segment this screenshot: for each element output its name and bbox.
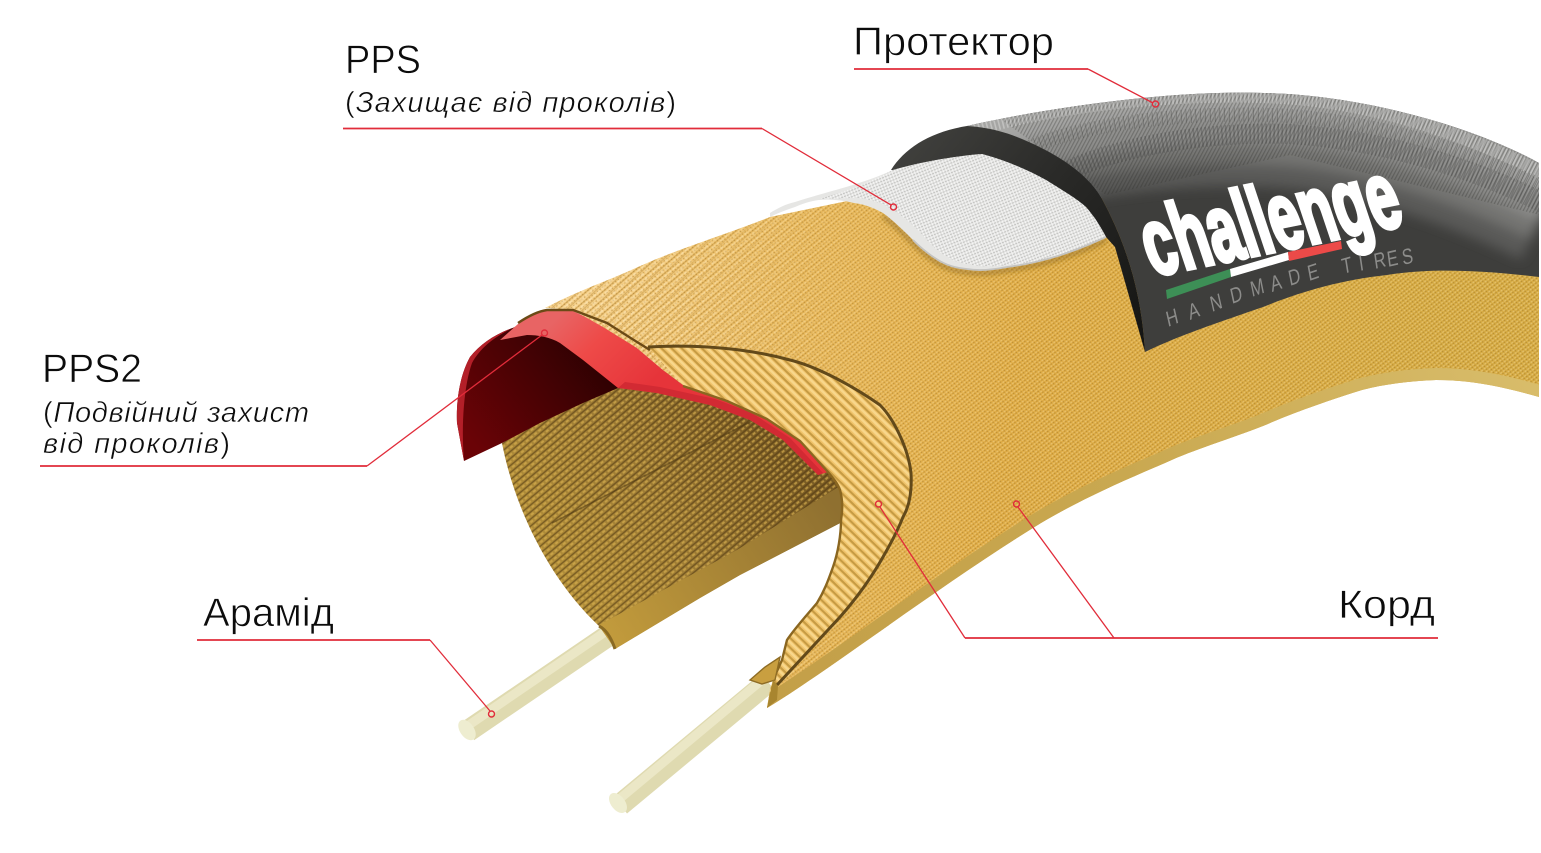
label: protector [853,20,1158,107]
label: protector: Протектор [853,20,1054,64]
label: PPS2 [40,330,548,466]
label: PPS2: від проколів) [43,428,230,460]
cord casing [517,198,1539,708]
challenge logo: challenge [1125,141,1413,296]
label: PPS2: PPS2 [42,347,142,391]
tread shading along arc [960,90,1541,215]
sidewall lower band [767,380,1539,708]
label: cord: Корд [1338,583,1435,627]
italian tricolor stripe [1166,241,1342,299]
bead rod: front aramid [605,680,768,816]
handmade tires caption: HANDMADE TIRES [1164,244,1415,332]
tread and black casing [891,90,1541,352]
inner casing weave [502,370,850,649]
label: PPS: PPS [345,38,421,82]
PPS2 red inner layer [457,310,828,475]
label: PPS [343,38,896,210]
bead rod: rear aramid [455,630,612,743]
label: PPS2: (Подвійний захист [43,397,309,429]
cord cross-section stripes [648,347,911,700]
tire cross-section illustration [455,90,1541,816]
label: aramid: Арамід [203,591,334,635]
label: PPS: (Захищає від проколів) [345,87,676,119]
label: aramid [197,591,494,717]
label: cord [876,501,1438,638]
PPS white mesh layer [770,154,1106,273]
